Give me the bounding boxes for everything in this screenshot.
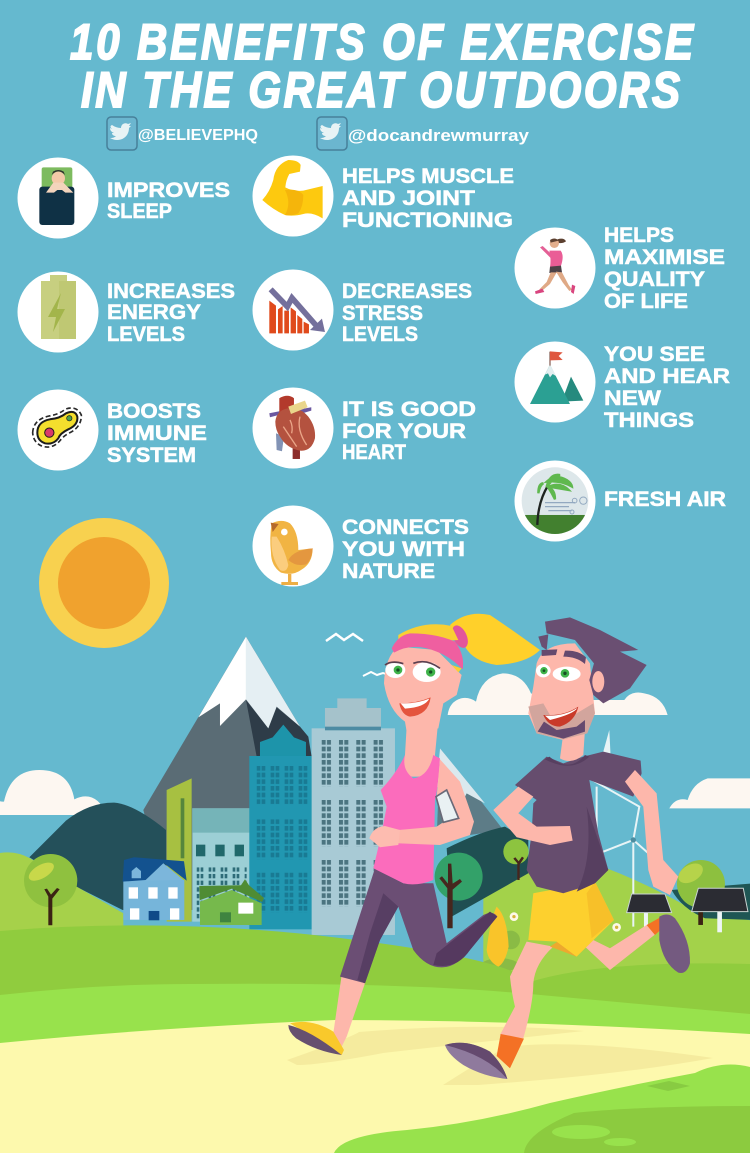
title: IN THE GREAT OUTDOORS (81, 61, 680, 118)
benefit: maximise quality of life: HELPS (604, 223, 674, 247)
benefit: increases energy levels: LEVELS (107, 322, 185, 346)
benefit: fresh air: FRESH AIR (604, 487, 726, 511)
benefit: muscle and joint functioning: HELPS MUSCLE (342, 164, 514, 188)
man back sock (647, 917, 667, 935)
benefit: connects you with nature: NATURE (342, 559, 435, 583)
man face (528, 643, 595, 740)
dark hill far right (672, 883, 750, 920)
icon: mountains with flag (530, 351, 583, 404)
benefit: improves sleep: IMPROVES (107, 178, 230, 202)
woman runner (288, 614, 540, 1055)
man neck (560, 730, 585, 761)
light green slope (483, 867, 750, 1010)
woman arm (397, 759, 474, 845)
icon: person sleeping in bed (39, 167, 74, 225)
icon: chick (270, 521, 313, 585)
wind turbine (589, 730, 656, 927)
benefit: see and hear new things: NEW (604, 386, 662, 410)
cloud left (0, 770, 109, 815)
light teal building (192, 808, 250, 922)
benefit: good for your heart (252, 388, 476, 468)
benefit: see and hear new things: YOU SEE (604, 342, 705, 366)
blue house (123, 857, 187, 920)
yellow-green tower (167, 778, 192, 922)
left green hill (0, 852, 123, 933)
icon: battery with lightning bolt (41, 275, 76, 339)
woman neck and chest (397, 720, 440, 777)
woman back shoe (487, 907, 509, 967)
man shirt (515, 752, 642, 893)
man left arm (493, 787, 573, 845)
benefit: maximise quality of life: MAXIMISE (604, 245, 725, 269)
benefit: connects you with nature: CONNECTS (342, 515, 469, 539)
woman hair top (398, 624, 458, 643)
man runner (445, 617, 690, 1079)
ponytail (450, 614, 540, 665)
icon: woman running (535, 238, 575, 294)
man ear (592, 671, 604, 692)
woman eyes (385, 662, 441, 682)
benefit: maximise quality of life: OF LIFE (604, 289, 688, 313)
bottom right grass (334, 1065, 750, 1153)
man stubble (528, 703, 595, 739)
benefit: maximise quality of life (514, 223, 725, 313)
man front shoe (445, 1043, 507, 1079)
twitter handle: docandrewmurray (317, 117, 530, 150)
bright grass band (0, 984, 750, 1153)
benefit: increases energy levels (18, 272, 235, 352)
twitter handle: BelievePHQ: @BELIEVEPHQ (138, 127, 258, 144)
teal skyscraper (249, 725, 316, 929)
benefit: boosts immune system (18, 390, 207, 470)
man front leg (500, 942, 553, 1038)
woman leggings (340, 868, 497, 983)
tree left (24, 854, 77, 925)
benefit: see and hear new things: THINGS (604, 408, 694, 432)
pale grey tower (312, 698, 395, 935)
benefit: good for your heart: IT IS GOOD (342, 397, 476, 421)
cloud right of the city (448, 673, 668, 715)
man back shoe (659, 914, 690, 973)
woman fist (369, 826, 400, 847)
benefit: decreases stress levels (252, 270, 472, 350)
tree far right (675, 859, 725, 925)
grass mid layer (0, 925, 750, 1153)
green house (199, 879, 264, 925)
benefit: see and hear new things (514, 342, 731, 432)
benefit: increases energy levels: INCREASES (107, 279, 235, 303)
benefit: boosts immune system: IMMUNE (107, 421, 207, 445)
birds (326, 634, 391, 676)
green round tree (435, 853, 483, 928)
snowy mountain (143, 637, 313, 910)
city and mountain landscape (0, 637, 395, 935)
benefit: decreases stress levels: STRESS (342, 301, 423, 325)
man collar (545, 755, 589, 766)
benefit: boosts immune system: SYSTEM (107, 443, 196, 467)
distant scenery right of the city (435, 673, 750, 1010)
twitter handle: BelievePHQ (107, 117, 258, 150)
benefit: muscle and joint functioning: FUNCTIONING (342, 208, 513, 232)
runner shadows (287, 1027, 713, 1085)
flowers and bushes (482, 912, 621, 972)
benefit: connects you with nature: YOU WITH (342, 537, 465, 561)
benefit: muscle and joint functioning: AND JOINT (342, 186, 475, 210)
far mountain behind runners (437, 748, 503, 840)
man front sock (497, 1034, 524, 1068)
man hair (545, 617, 647, 703)
benefit: connects you with nature (252, 506, 469, 586)
man mouth (543, 707, 578, 727)
man eyes (536, 649, 586, 681)
woman front shoe (288, 1022, 344, 1055)
small tree (503, 839, 529, 880)
benefit: muscle and joint functioning (252, 156, 514, 236)
runners (288, 614, 690, 1079)
benefit: maximise quality of life: QUALITY (604, 267, 705, 291)
woman mouth (399, 697, 431, 717)
icon: anatomical heart (269, 396, 315, 459)
woman front calf (333, 975, 365, 1047)
dark teal hill (447, 827, 528, 917)
dark hill (29, 803, 166, 910)
man shorts (528, 882, 614, 957)
sun (39, 518, 169, 648)
benefit: decreases stress levels: LEVELS (342, 322, 418, 346)
phone armband (436, 790, 459, 822)
sand path (0, 1020, 750, 1153)
twitter handle: docandrewmurray: @docandrewmurray (348, 126, 530, 145)
benefit: see and hear new things: AND HEAR (604, 364, 731, 388)
benefit: boosts immune system: BOOSTS (107, 399, 201, 423)
man right arm (625, 770, 678, 895)
benefit: fresh air (514, 460, 726, 542)
scrunchie (449, 623, 471, 650)
benefit: improves sleep: SLEEP (107, 199, 172, 223)
icon: immune cell (33, 408, 81, 447)
title (70, 13, 695, 118)
benefit: good for your heart: FOR YOUR (342, 419, 467, 443)
woman tank top (373, 755, 440, 884)
icon: falling chart (269, 289, 325, 333)
man goatee (538, 720, 585, 739)
title: 10 BENEFITS OF EXERCISE (70, 13, 695, 70)
woman head (384, 647, 462, 732)
benefit: increases energy levels: ENERGY (107, 300, 201, 324)
cloud far right (669, 778, 750, 808)
woman headband (392, 633, 463, 669)
icon: flexed bicep (262, 160, 323, 218)
benefit: decreases stress levels: DECREASES (342, 279, 472, 303)
benefit: improves sleep (18, 158, 230, 238)
benefit: good for your heart: HEART (342, 440, 406, 464)
icon: palm tree in the wind (520, 467, 590, 538)
man back leg (585, 925, 660, 970)
solar panels (627, 888, 748, 932)
